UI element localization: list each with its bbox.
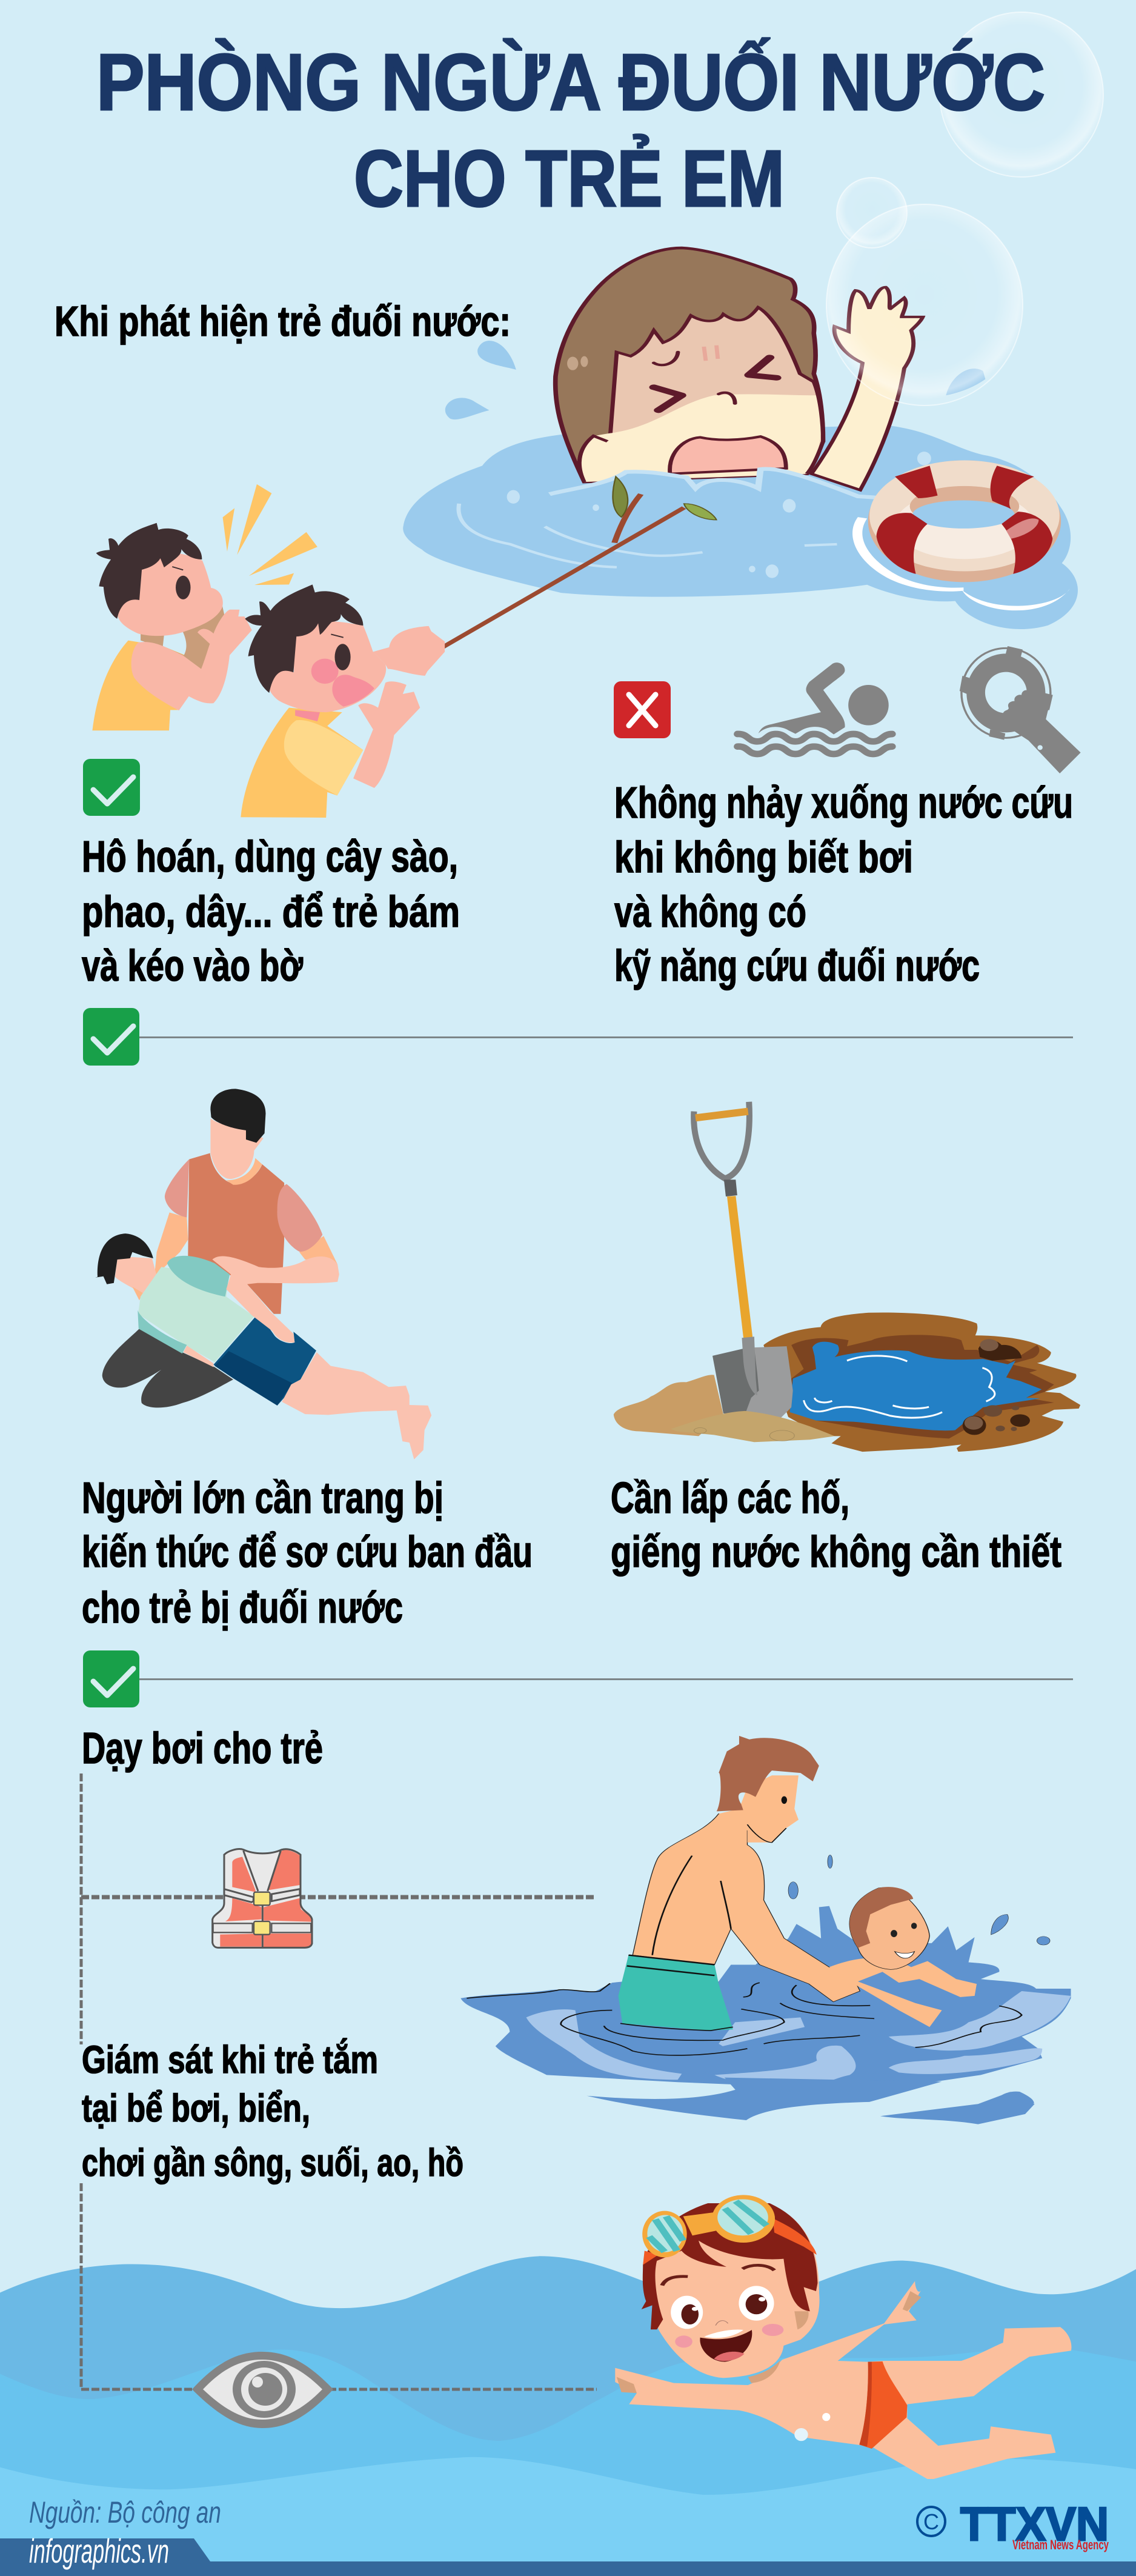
title — [96, 38, 1045, 223]
swim shorts — [619, 1955, 733, 2030]
text: first aid knowledge: kiến thức để sơ cứu ban đầu — [82, 1528, 533, 1577]
shovel handle — [694, 1102, 749, 1178]
text: first aid knowledge — [82, 1474, 533, 1632]
text: shout and use pole: Hô hoán, dùng cây sào, — [82, 833, 458, 881]
icon: red cross — [614, 681, 671, 738]
ripple lines — [467, 1983, 1021, 2055]
title: PHÒNG NGỪA ĐUỐI NƯỚC — [96, 38, 1045, 127]
tan dirt — [614, 1375, 723, 1436]
bottom sea waves — [0, 2256, 1136, 2576]
raised arm — [811, 287, 923, 490]
illustration: shovel and water hole — [614, 1102, 1080, 1452]
hair — [556, 248, 823, 482]
text: do not jump in: kỹ năng cứu đuối nước — [614, 942, 980, 990]
icon: green check 3 — [83, 1650, 139, 1707]
kid 1 — [92, 523, 252, 730]
goggles — [683, 2212, 717, 2235]
body — [615, 2281, 1071, 2479]
branch — [420, 494, 684, 661]
shout rays — [223, 484, 317, 585]
icon: life jacket — [213, 1849, 312, 1947]
man head — [719, 1775, 799, 1843]
text: shout and use pole — [82, 833, 460, 990]
baby — [829, 1958, 977, 2027]
illustration: adult giving first aid — [95, 1089, 431, 1460]
logo: TTXVN: TTXVN — [960, 2497, 1109, 2551]
head — [651, 2204, 820, 2378]
rocks — [978, 1340, 1021, 1361]
kid 2 — [241, 584, 445, 818]
water front — [547, 468, 879, 533]
facial features — [654, 352, 777, 410]
face — [579, 307, 823, 482]
eyes — [671, 2296, 703, 2329]
sand pile — [671, 1411, 835, 1442]
decorative bubbles — [826, 12, 1103, 405]
icon: green check 1 — [83, 759, 140, 816]
dashed connector lines — [81, 1774, 597, 2389]
man body — [633, 1814, 860, 2002]
water — [790, 1342, 1041, 1430]
title: CHO TRẺ EM — [354, 134, 785, 223]
brown pit — [763, 1312, 1080, 1452]
icon: hand holding rescue ring — [960, 646, 1081, 773]
illustration: parent teaching child to swim — [460, 1736, 1071, 2103]
water puddle — [403, 425, 1078, 629]
text: shout and use pole: và kéo vào bờ — [82, 942, 304, 990]
splash droplets — [788, 1855, 1050, 1945]
text: supervise children — [82, 2038, 463, 2184]
text: teach swimming: Dạy bơi cho trẻ — [82, 1724, 323, 1773]
text: fill holes: Cần lấp các hố, — [611, 1474, 849, 1523]
open mouth — [670, 436, 786, 474]
text: first aid knowledge: cho trẻ bị đuối nước — [82, 1584, 403, 1632]
intro heading: Khi phát hiện trẻ đuối nước: — [55, 298, 511, 345]
text: do not jump in — [614, 779, 1073, 990]
source note: Nguồn: Bộ công an — [29, 2495, 221, 2529]
hair — [642, 2203, 817, 2329]
cheeks — [675, 2335, 693, 2347]
icon: green check 2 — [83, 1008, 139, 1066]
icon: swimmer — [737, 662, 892, 754]
water lower pool pieces — [587, 2078, 1035, 2124]
illustration: drowning child with lifebuoy — [403, 248, 1078, 661]
pants — [102, 1329, 233, 1407]
child — [95, 1233, 431, 1460]
text: supervise children: chơi gần sông, suối, ao, hồ — [82, 2141, 463, 2184]
swimsuit — [859, 2361, 907, 2449]
illustration: happy swimming boy — [615, 2195, 1071, 2479]
adult — [154, 1089, 337, 1314]
adult arm over child — [212, 1256, 339, 1343]
text: shout and use pole: phao, dây... để trẻ bám — [82, 888, 460, 936]
text: do not jump in: khi không biết bơi — [614, 833, 913, 882]
logo: TTXVN: C — [923, 2509, 939, 2534]
mouth — [700, 2330, 752, 2362]
text: supervise children: tại bể bơi, biển, — [82, 2086, 310, 2130]
water droplets — [445, 341, 985, 419]
pool water — [460, 1906, 1071, 2103]
text: supervise children: Giám sát khi trẻ tắm — [82, 2038, 378, 2081]
footer band — [0, 2532, 1136, 2576]
text: fill holes — [611, 1474, 1061, 1577]
lifebuoy — [852, 460, 1070, 610]
text: first aid knowledge: Người lớn cần trang bị — [82, 1474, 443, 1523]
icon: eye — [192, 2352, 333, 2428]
illustration: two kids shouting with stick — [92, 484, 445, 818]
text: do not jump in: và không có — [614, 888, 806, 936]
blade — [712, 1346, 793, 1418]
footer band: infographics.vn — [29, 2532, 169, 2570]
water highlights — [526, 1991, 1071, 2094]
